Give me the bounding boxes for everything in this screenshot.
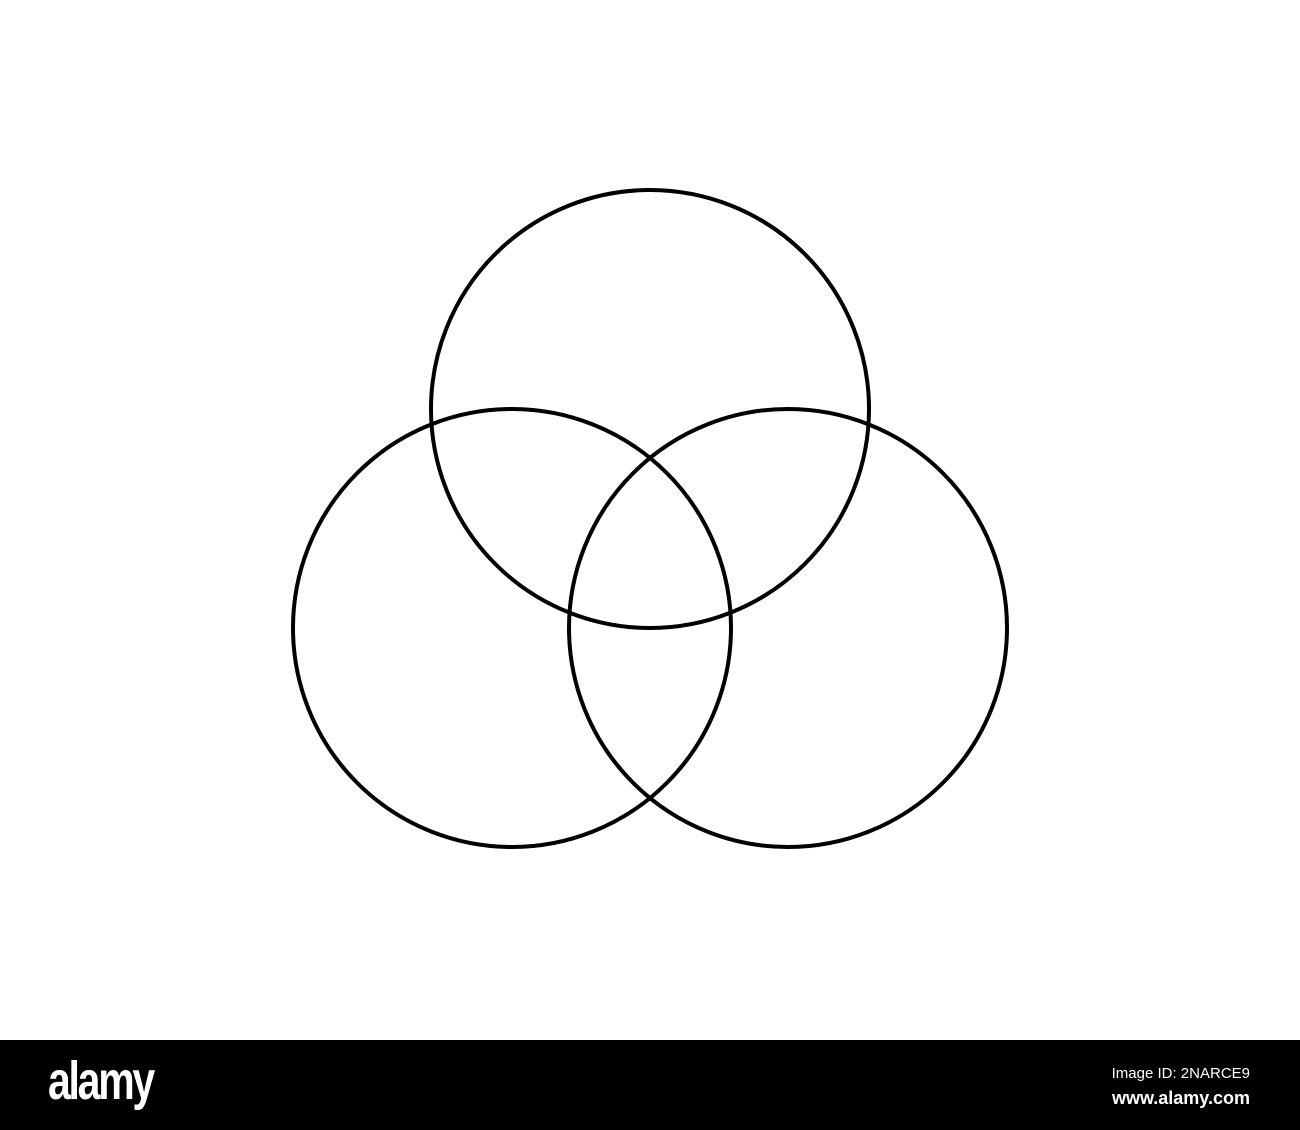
image id and url bbox=[1112, 1065, 1250, 1108]
footer bar bbox=[0, 1040, 1300, 1130]
image id and url: www.alamy.com bbox=[1112, 1088, 1250, 1108]
image id and url: Image ID: 2NARCE9 bbox=[1112, 1065, 1250, 1082]
circle: right bbox=[569, 409, 1007, 847]
circle: top bbox=[431, 190, 869, 628]
logo: alamy bbox=[48, 1051, 153, 1111]
circle: left bbox=[293, 409, 731, 847]
